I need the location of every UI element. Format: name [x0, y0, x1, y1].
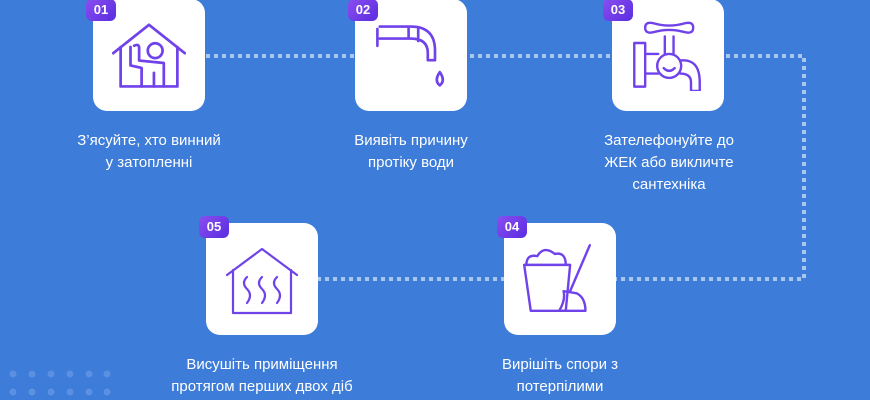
icon: dripping pipe — [376, 25, 444, 87]
badge 01: 01 — [94, 2, 108, 17]
icon: house with steam — [226, 248, 298, 314]
step 01 card — [93, 0, 205, 111]
text 02: протіку води — [368, 154, 454, 171]
step 02 card — [355, 0, 467, 111]
badge 01 — [86, 0, 116, 21]
badge 04 — [497, 216, 527, 238]
text 02 — [354, 132, 468, 171]
text 01: у затопленні — [106, 154, 192, 171]
text 05: Висушіть приміщення — [186, 356, 338, 373]
text 01 — [77, 132, 221, 171]
step 05 card — [206, 223, 318, 335]
text 05 — [171, 356, 353, 395]
badge 03 — [603, 0, 633, 21]
text 03: сантехніка — [632, 176, 706, 193]
decorative dots — [10, 370, 110, 396]
text 03 — [604, 132, 734, 193]
step 04 card — [504, 223, 616, 335]
badge 02 — [348, 0, 378, 21]
text 02: Виявіть причину — [354, 132, 468, 149]
icon: bucket and mop — [523, 244, 591, 312]
step 03 card — [612, 0, 724, 111]
text 04: потерпілими — [517, 378, 603, 395]
icon: faucet — [633, 22, 701, 91]
text 04 — [502, 356, 618, 395]
text 03: ЖЕК або викличте — [604, 154, 734, 171]
badge 03: 03 — [611, 2, 625, 17]
text 03: Зателефонуйте до — [604, 132, 734, 149]
badge 05 — [199, 216, 229, 238]
text 05: протягом перших двох діб — [171, 378, 353, 395]
icon: house with person — [112, 23, 186, 88]
text 01: З’ясуйте, хто винний — [77, 132, 221, 149]
badge 02: 02 — [356, 2, 370, 17]
badge 05: 05 — [207, 219, 221, 234]
text 04: Вирішіть спори з — [502, 356, 618, 373]
badge 04: 04 — [505, 219, 519, 234]
